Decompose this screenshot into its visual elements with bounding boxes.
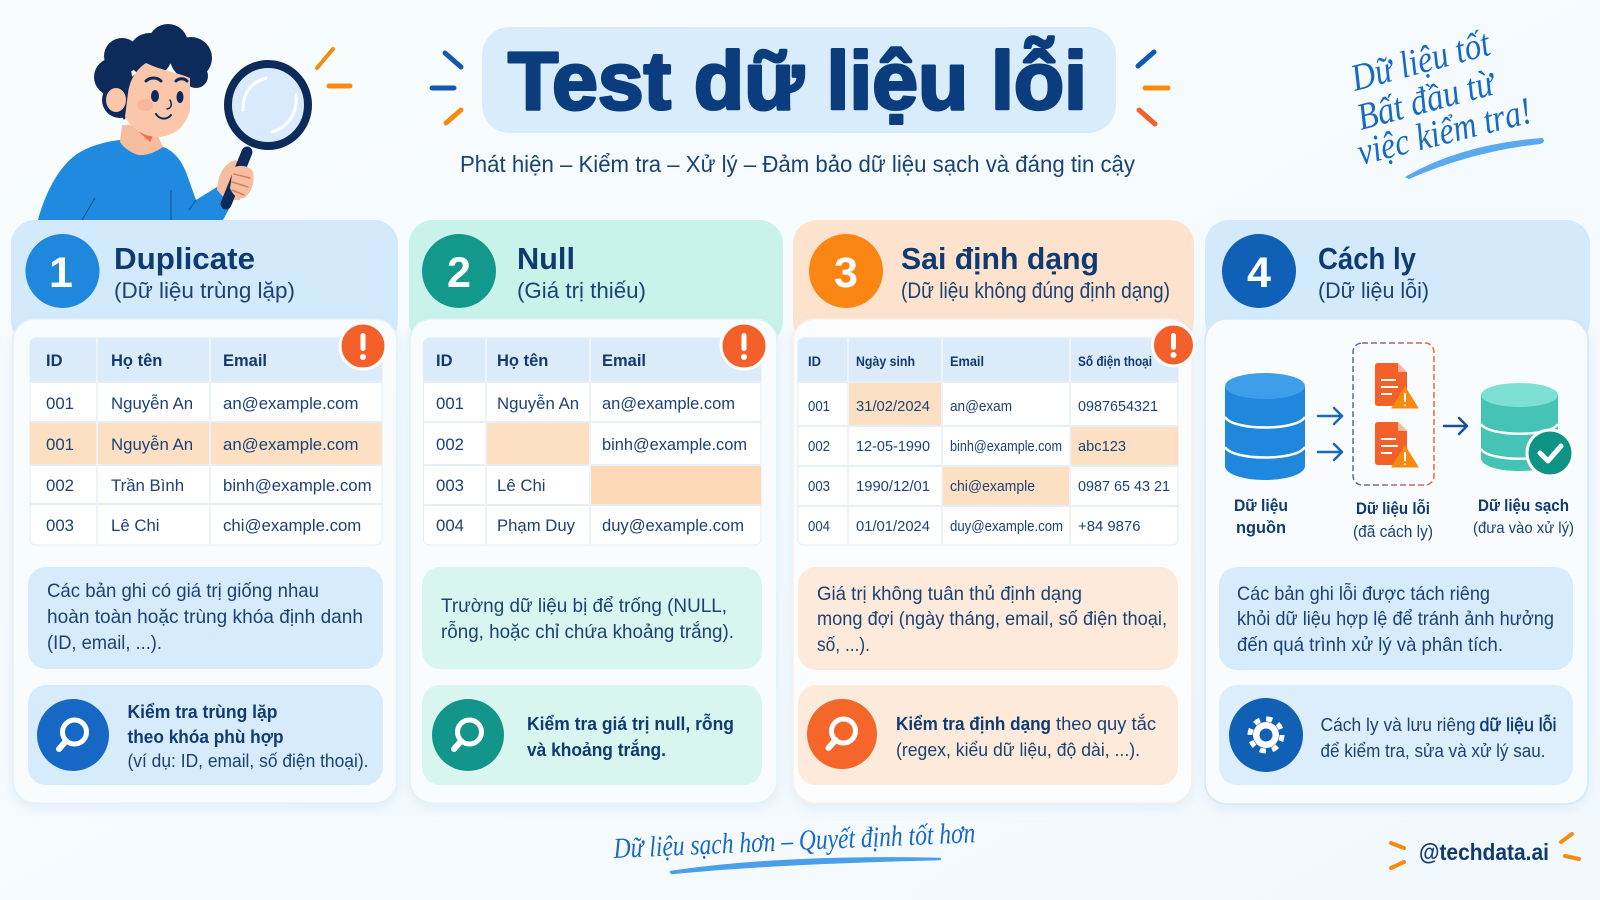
table: duplicate records: an@example.com xyxy=(223,394,358,413)
table: null values: Phạm Duy xyxy=(497,516,576,535)
table: null values: Email xyxy=(602,352,646,370)
table: duplicate records: Email xyxy=(223,352,267,370)
table: format errors: ID xyxy=(808,353,821,369)
icon: source database xyxy=(1225,373,1305,480)
table: duplicate records: binh@example.com xyxy=(223,476,372,495)
heading: Sai định dạng: Sai định dạng xyxy=(901,241,1099,276)
title spark lines xyxy=(432,52,1168,124)
action box xyxy=(422,685,762,785)
handwritten note: việc kiểm tra! xyxy=(1353,90,1536,174)
label: source data: nguồn xyxy=(1236,518,1286,537)
table: duplicate records: Họ tên xyxy=(111,352,162,370)
description box: hoàn toàn hoặc trùng khóa định danh xyxy=(47,606,363,628)
table: null values xyxy=(424,338,761,545)
action box: Kiểm tra định dạng xyxy=(896,713,1051,734)
table: null values: Lê Chi xyxy=(497,476,546,495)
number badge 4 xyxy=(1222,234,1296,308)
arrows into quarantine xyxy=(1318,408,1342,460)
description box: rỗng, hoặc chỉ chứa khoảng trắng). xyxy=(441,620,734,643)
table: null values: Nguyễn An xyxy=(497,394,579,413)
label: clean data xyxy=(1473,496,1574,537)
subtitle: Phát hiện – Kiểm tra – Xử lý – Đảm bảo dữ liệu sạch và đáng tin cậy xyxy=(460,151,1135,177)
table: format errors: 31/02/2024 xyxy=(856,399,930,415)
description box: Các bản ghi lỗi được tách riêng xyxy=(1237,582,1490,605)
description box xyxy=(28,567,383,669)
table: null values: 002 xyxy=(436,435,464,454)
table: format errors: abc123 xyxy=(1078,439,1126,455)
description box xyxy=(422,567,762,669)
table: format errors: +84 9876 xyxy=(1078,519,1140,535)
heading: Duplicate: Duplicate xyxy=(114,241,255,276)
label: source data: Dữ liệu xyxy=(1234,496,1288,515)
table: duplicate records: chi@example.com xyxy=(223,516,361,535)
table: format errors: duy@example.com xyxy=(950,519,1063,535)
description box: khỏi dữ liệu hợp lệ để tránh ảnh hưởng xyxy=(1237,608,1554,630)
heading: Cách ly xyxy=(1318,241,1429,303)
number badge 3 xyxy=(809,234,883,308)
description box: mong đợi (ngày tháng, email, số điện thoại, xyxy=(817,608,1167,630)
heading: Null: Null xyxy=(517,241,575,276)
description box: số, ...). xyxy=(817,634,870,656)
panel 1: duplicate xyxy=(11,220,398,803)
table: null values: 004 xyxy=(436,516,464,535)
table: format errors: Số điện thoại xyxy=(1078,353,1152,369)
panel 2: null xyxy=(409,220,783,803)
icon: magnifier xyxy=(807,699,877,769)
action box: dữ liệu lỗi xyxy=(1480,714,1556,735)
table: duplicate records: Trần Bình xyxy=(111,476,184,495)
heading: Duplicate: (Dữ liệu trùng lặp) xyxy=(114,278,295,303)
description box: Các bản ghi có giá trị giống nhau xyxy=(47,580,319,602)
table: format errors: 004 xyxy=(808,519,830,535)
handwritten note: Dữ liệu tốt xyxy=(1346,22,1496,100)
table: null values: Họ tên xyxy=(497,352,548,370)
number badge 1: 1 xyxy=(49,249,73,297)
icon: magnifier xyxy=(432,699,504,771)
action box: Kiểm tra giá trị null, rỗng xyxy=(527,713,734,734)
table: duplicate records: 001 xyxy=(46,394,74,413)
action box: và khoảng trắng. xyxy=(527,739,666,760)
table: duplicate records: 003 xyxy=(46,516,74,535)
table: format errors: 1990/12/01 xyxy=(856,479,930,495)
icon: clean database xyxy=(1481,383,1573,476)
alert icon xyxy=(721,323,767,369)
icon: magnifier xyxy=(37,699,109,771)
table: duplicate records: Nguyễn An xyxy=(111,435,193,454)
heading: Duplicate xyxy=(114,241,295,303)
table: format errors: 001 xyxy=(808,399,830,415)
label: clean data: Dữ liệu sạch xyxy=(1478,496,1569,515)
table: format errors: 0987 65 43 21 xyxy=(1078,479,1170,495)
action box: Cách ly và lưu riêng xyxy=(1320,714,1476,735)
alert icon xyxy=(340,323,386,369)
table: duplicate records: ID xyxy=(46,352,63,370)
icon: error document top xyxy=(1375,363,1418,408)
description box xyxy=(1219,567,1573,670)
table: format errors: 0987654321 xyxy=(1078,399,1158,415)
alert icon xyxy=(1152,324,1194,366)
heading: Null xyxy=(517,241,646,303)
action box xyxy=(28,685,383,785)
label: clean data: (đưa vào xử lý) xyxy=(1473,520,1574,537)
number badge 2 xyxy=(422,234,496,308)
table: format errors: an@exam xyxy=(950,399,1012,415)
table: null values: duy@example.com xyxy=(602,516,744,535)
table: duplicate records: an@example.com xyxy=(223,435,358,454)
description box: Giá trị không tuân thủ định dạng xyxy=(817,583,1082,605)
number badge 3: 3 xyxy=(834,249,858,297)
footer slogan xyxy=(612,817,976,873)
number badge 4: 4 xyxy=(1247,249,1271,297)
table: format errors: chi@example xyxy=(950,479,1035,495)
table: format errors: binh@example.com xyxy=(950,439,1062,455)
table: duplicate records: Lê Chi xyxy=(111,516,160,535)
table: duplicate records: Nguyễn An xyxy=(111,394,193,413)
table: null values: ID xyxy=(436,352,453,370)
action box: (regex, kiểu dữ liệu, độ dài, ...). xyxy=(896,739,1140,760)
action box xyxy=(1219,685,1573,785)
heading: Sai định dạng: (Dữ liệu không đúng định dạng) xyxy=(901,278,1170,303)
brand handle xyxy=(1391,834,1579,868)
description box: đến quá trình xử lý và phân tích. xyxy=(1237,634,1503,656)
footer slogan: Dữ liệu sạch hơn – Quyết định tốt hơn xyxy=(612,817,976,865)
table: format errors: Email xyxy=(950,353,984,369)
description box xyxy=(798,567,1178,670)
action box xyxy=(798,685,1178,785)
table: format errors: 01/01/2024 xyxy=(856,519,930,535)
table: format errors xyxy=(798,338,1178,545)
label: source data xyxy=(1234,496,1288,537)
brand handle: @techdata.ai xyxy=(1419,839,1549,865)
heading: Cách ly: Cách ly xyxy=(1318,241,1417,276)
table: null values: 003 xyxy=(436,476,464,495)
action box: để kiểm tra, sửa và xử lý sau. xyxy=(1320,740,1546,761)
arrow to clean data xyxy=(1444,418,1467,434)
diagram: quarantine flow xyxy=(1225,343,1574,541)
description box: Trường dữ liệu bị để trống (NULL, xyxy=(441,595,727,617)
handwritten note xyxy=(1346,22,1543,178)
icon: gear xyxy=(1229,698,1303,772)
handwritten note: Bất đầu từ xyxy=(1352,61,1501,139)
table: format errors: Ngày sinh xyxy=(856,353,915,369)
label: quarantined data: (đã cách ly) xyxy=(1353,522,1433,541)
table: format errors: 003 xyxy=(808,479,830,495)
description box: (ID, email, ...). xyxy=(47,632,162,654)
label: quarantined data: Dữ liệu lỗi xyxy=(1356,499,1430,518)
table: duplicate records: 002 xyxy=(46,476,74,495)
heading: Sai định dạng xyxy=(901,241,1170,303)
table: format errors: 002 xyxy=(808,439,830,455)
number badge 2: 2 xyxy=(447,249,471,297)
illustration: person with magnifying glass xyxy=(38,24,350,220)
number badge 1 xyxy=(26,234,100,308)
label: quarantined data xyxy=(1353,499,1433,541)
table: format errors: 12-05-1990 xyxy=(856,439,930,455)
table: null values: binh@example.com xyxy=(602,435,747,454)
table: null values: 001 xyxy=(436,394,464,413)
action box: (ví dụ: ID, email, số điện thoại). xyxy=(128,750,368,771)
action box: theo quy tắc xyxy=(1056,713,1156,734)
dashed quarantine box xyxy=(1353,343,1434,485)
icon: error document bottom xyxy=(1375,422,1418,467)
action box: Kiểm tra trùng lặp xyxy=(128,701,278,722)
table: duplicate records xyxy=(30,338,382,545)
heading: Cách ly: (Dữ liệu lỗi) xyxy=(1318,278,1429,303)
panel 4: isolation xyxy=(1205,220,1590,804)
table: duplicate records: 001 xyxy=(46,435,74,454)
heading: Null: (Giá trị thiếu) xyxy=(517,278,646,303)
action box: theo khóa phù hợp xyxy=(128,726,284,747)
title banner: Test dữ liệu lỗi xyxy=(508,36,1087,127)
table: null values: an@example.com xyxy=(602,394,735,413)
panel 3: wrong format xyxy=(793,220,1194,803)
